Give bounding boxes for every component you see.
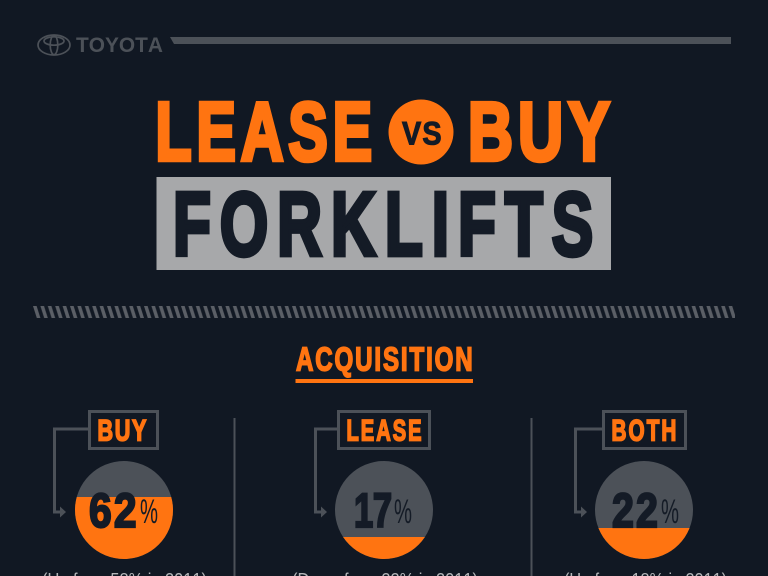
icon: toyota logo: [38, 35, 70, 55]
label box: buy: BUY: [98, 413, 146, 447]
brand name: TOYOTA: [76, 34, 163, 57]
column divider left: [234, 418, 236, 576]
vs badge: VS: [402, 116, 442, 152]
chart: 17 percent circle: [335, 461, 433, 559]
vs badge: [388, 100, 454, 164]
chart: 17 percent circle: 17: [354, 483, 392, 537]
label box: buy: [90, 412, 158, 448]
header bar: [170, 37, 731, 44]
panel: lease: [292, 412, 478, 576]
chart: 17 percent circle: %: [394, 493, 412, 531]
title: forklifts banner: FORKLIFTS: [173, 175, 593, 275]
panel: both: [564, 412, 727, 576]
label box: both: [604, 412, 686, 448]
title: lease vs buy: LEASE: [156, 86, 372, 178]
section heading: acquisition: ACQUISITION: [296, 342, 473, 378]
column divider right: [530, 418, 532, 576]
label box: lease: LEASE: [346, 414, 422, 447]
arrow: lease: [316, 429, 337, 518]
panel: buy: [42, 412, 207, 576]
label box: both: BOTH: [612, 415, 676, 447]
chart: 22 percent circle: %: [661, 493, 679, 531]
chart: 22 percent circle: 22: [612, 484, 658, 538]
chart: 62 percent circle: [75, 461, 173, 559]
title: lease vs buy: [156, 85, 610, 178]
chart: 22 percent circle: [595, 461, 693, 559]
chart: 62 percent circle: %: [140, 493, 158, 531]
striped divider: [33, 306, 735, 318]
arrow: both: [576, 429, 602, 518]
chart: 62 percent circle: 62: [89, 485, 137, 538]
arrow: buy: [54, 429, 88, 518]
title: lease vs buy: BUY: [468, 85, 610, 178]
